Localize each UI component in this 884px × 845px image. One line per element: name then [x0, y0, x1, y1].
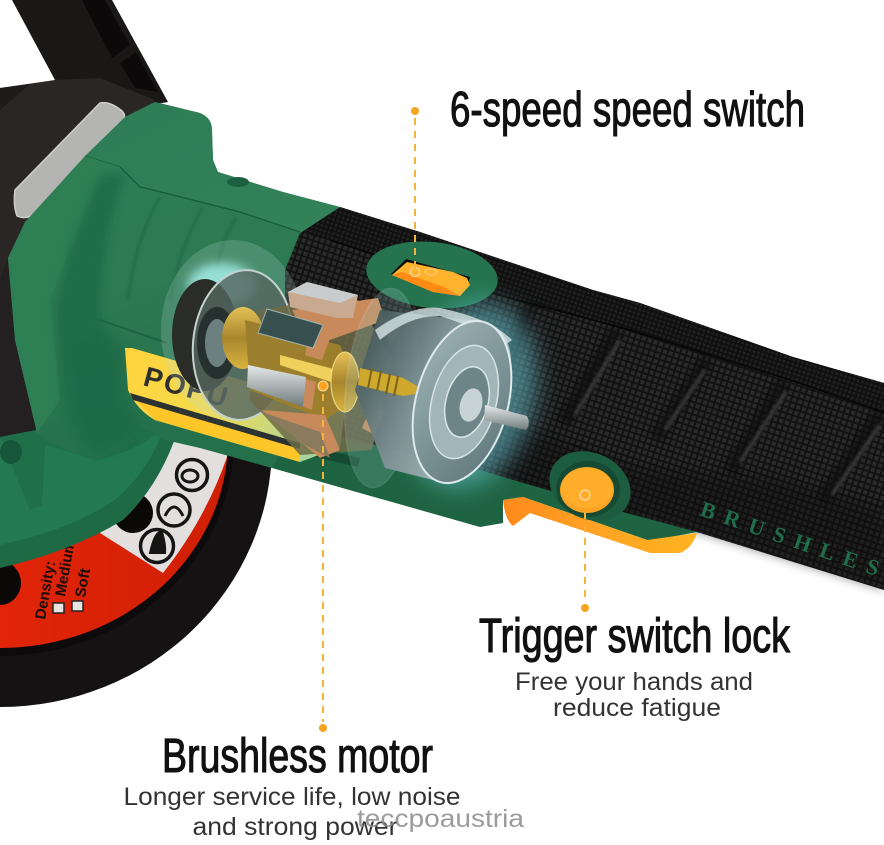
black rubber grip [280, 207, 884, 591]
gold collar [331, 352, 359, 412]
green gear housing [0, 400, 178, 568]
density text [32, 539, 94, 621]
left facet [8, 156, 120, 433]
stator pole dark [258, 309, 323, 348]
button collar [538, 438, 642, 534]
label strip [125, 348, 345, 462]
product type: BRUSHLESS POLISHER [177, 408, 259, 437]
pointer line: motor [319, 394, 327, 732]
housing dome [0, 400, 165, 545]
silver latch [14, 103, 124, 218]
rear handle [0, 0, 168, 437]
shell ribs [128, 197, 237, 300]
stator gold frame [250, 295, 392, 455]
grip top band [300, 207, 884, 410]
grip lower shade [500, 420, 884, 590]
stator pole silver [247, 365, 306, 407]
switch slot [391, 259, 470, 290]
gold bushing [222, 307, 264, 369]
text: motor description: Longer service life, low noise [124, 783, 460, 811]
top facet [85, 102, 340, 233]
main shell [8, 102, 340, 468]
dark gearbox cover [0, 78, 155, 300]
lower green strip [272, 425, 697, 541]
density text: Density: [32, 559, 59, 621]
text: trigger lock description: Free your hands and [515, 668, 753, 696]
trigger switch lock button [538, 438, 642, 534]
text: motor description [124, 783, 460, 841]
stator pole bottom [262, 412, 330, 458]
motor pointer dot [318, 381, 328, 391]
yellow dial [392, 262, 470, 296]
heading: trigger lock: Trigger switch lock [479, 610, 791, 663]
grip ribs [498, 307, 880, 500]
copper windings [262, 298, 400, 458]
pointer line: trigger lock [581, 512, 589, 612]
switch collar [363, 235, 501, 315]
pointer line: speed switch [411, 107, 419, 270]
yellow label [125, 348, 345, 462]
density text: Soft [72, 567, 94, 599]
housing rim [0, 400, 178, 568]
cutaway brushless motor [161, 240, 557, 504]
grip rib highlights [575, 340, 880, 495]
cyan glow [383, 286, 557, 504]
mounting holes [0, 493, 153, 605]
glass flange [336, 285, 428, 491]
motor can [355, 310, 511, 483]
shell valley shading [55, 175, 143, 455]
density text: Medium [52, 539, 79, 598]
rear halo disc [161, 240, 305, 420]
polishing pad disc [0, 183, 272, 707]
black backing disc [0, 183, 272, 707]
watermark: teccpoaustria [357, 805, 524, 833]
output shaft [484, 405, 529, 430]
abrasive label red sector [0, 232, 228, 648]
button cap [560, 467, 614, 513]
abrasive label white sector [100, 400, 227, 573]
trigger paddle [503, 497, 697, 553]
green body shell [8, 102, 697, 541]
safety icons [140, 460, 208, 562]
rear bearing [172, 266, 299, 424]
threaded shaft [358, 368, 417, 396]
text: motor description: and strong power [192, 813, 398, 841]
heading: motor: Brushless motor [162, 730, 433, 783]
speed switch [363, 235, 501, 315]
grip base [280, 207, 884, 590]
brand name: POPU [140, 361, 233, 413]
text: trigger lock description [515, 668, 753, 722]
text: trigger lock description: reduce fatigue [553, 694, 721, 722]
stator pole top [288, 282, 358, 318]
motor front face [396, 310, 528, 494]
rotor core [245, 320, 362, 420]
handle bar [12, 0, 168, 110]
